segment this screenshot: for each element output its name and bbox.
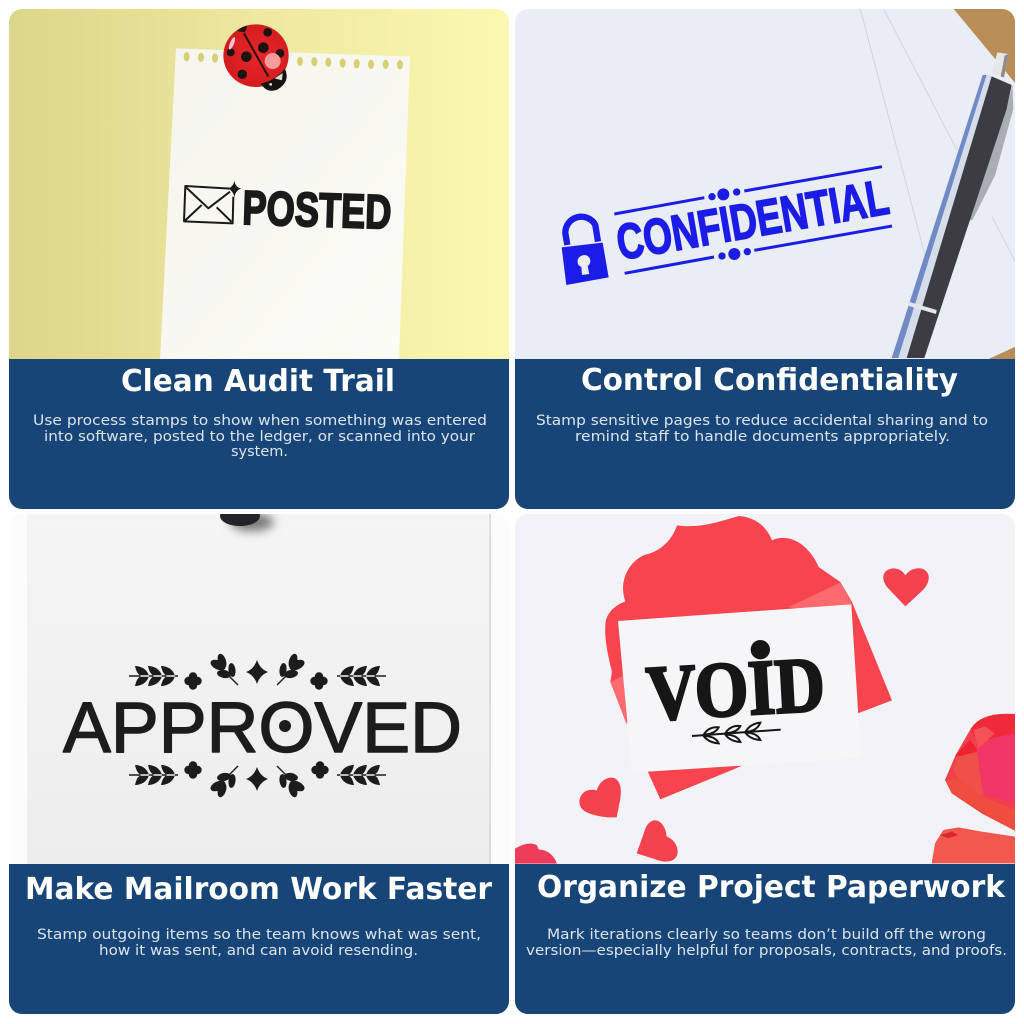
stamp: CONFIDENTIAL	[562, 167, 893, 285]
body text: Use process stamps to show when something was entered	[33, 413, 487, 429]
body text	[526, 927, 1007, 959]
stamp rules and dots	[614, 167, 892, 273]
body text: Mark iterations clearly so teams don’t build off the wrong	[547, 927, 986, 943]
body text: Stamp outgoing items so the team knows what was sent,	[37, 927, 481, 943]
body text: Stamp sensitive pages to reduce accidental sharing and to	[536, 413, 988, 429]
panel: control confidentiality	[515, 9, 1015, 509]
photo background: yellow wall	[9, 9, 509, 359]
stamp: APPROVED	[63, 653, 462, 798]
heading: Make Mailroom Work Faster	[25, 872, 492, 907]
label: POSTED: POSTED	[242, 182, 392, 240]
icon: ladybug magnet	[223, 24, 289, 91]
panel: clean audit trail	[9, 9, 509, 509]
photo: pen	[892, 52, 1013, 358]
caption band	[9, 864, 509, 1014]
caption band	[515, 359, 1015, 509]
label: APPROVED: APPROVED	[63, 689, 462, 768]
photo: paper hearts	[579, 568, 929, 862]
dot over I	[751, 640, 770, 659]
heading: Clean Audit Trail	[121, 364, 395, 399]
label: VOID: VOID	[644, 640, 827, 737]
centre dot of O	[279, 720, 291, 732]
ornaments: bottom row	[129, 761, 386, 798]
photo: red tulips right	[932, 714, 1015, 863]
body text	[33, 413, 487, 460]
body text: system.	[231, 444, 288, 460]
body text	[536, 413, 988, 445]
stamp: POSTED	[183, 180, 391, 230]
caption band	[515, 864, 1015, 1014]
icon: envelope with sparkle	[184, 181, 241, 223]
panel: make mailroom work faster	[9, 506, 509, 1014]
heading: Organize Project Paperwork	[537, 870, 1006, 905]
photo background: white card	[9, 506, 509, 864]
caption band	[9, 359, 509, 509]
panel: organize project paperwork	[515, 514, 1015, 1014]
photo: red scalloped envelope	[605, 516, 892, 799]
photo background: pale surface	[515, 514, 1015, 864]
heading: Control Confidentiality	[581, 363, 958, 398]
body text: how it was sent, and can avoid resending.	[99, 943, 418, 959]
leaf sprig	[692, 723, 781, 743]
icon: padlock	[562, 217, 609, 285]
photo: white card	[618, 604, 861, 773]
photo: torn notepaper	[160, 48, 410, 359]
label: CONFIDENTIAL: CONFIDENTIAL	[612, 169, 893, 271]
photo: red tulip left	[515, 843, 557, 864]
body text: version—especially helpful for proposals, contracts, and proofs.	[526, 943, 1007, 959]
stamp: VOID	[644, 640, 827, 743]
body text: into software, posted to the ledger, or scanned into your	[44, 429, 475, 445]
ornaments: top row	[129, 653, 386, 690]
photo background: white paper and wood	[515, 9, 1015, 359]
body text: remind staff to handle documents appropriately.	[575, 429, 950, 445]
body text	[37, 927, 481, 959]
